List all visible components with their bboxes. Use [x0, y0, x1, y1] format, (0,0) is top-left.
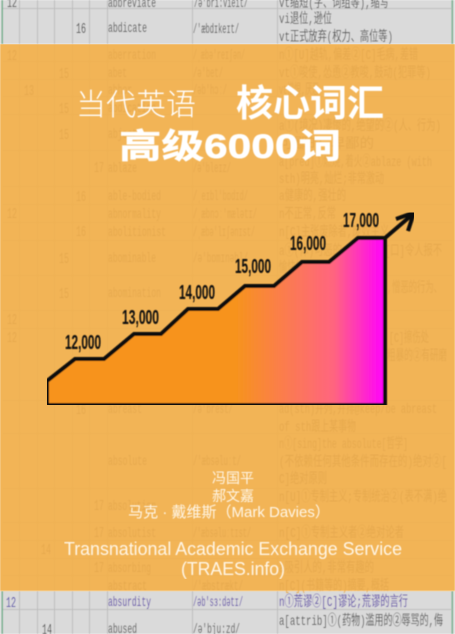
orange overlay panel with faded spreadsheet: of sth跟上某事物 [279, 419, 356, 436]
orange overlay panel with faded spreadsheet: n不正常,反常 [279, 206, 336, 223]
orange overlay panel with faded spreadsheet: 15 [59, 127, 69, 144]
orange overlay panel with faded spreadsheet: 13 [24, 83, 34, 100]
orange overlay panel with faded spreadsheet: n[C]主张废除者,废奴主义 [279, 223, 389, 241]
orange overlay panel with faded spreadsheet: 15 [59, 286, 69, 303]
step value labels: 13,000 [122, 307, 159, 329]
orange overlay panel with faded spreadsheet: 12 [7, 48, 17, 65]
orange overlay panel with faded spreadsheet: 12 [7, 330, 17, 347]
title [76, 83, 384, 166]
orange overlay panel with faded spreadsheet: 愉快的 [279, 260, 304, 277]
orange overlay panel with faded spreadsheet: 可鄙的,卑鄙的 [279, 135, 374, 153]
step value labels: 16,000 [290, 233, 326, 255]
orange overlay panel with faded spreadsheet: 12 [7, 206, 17, 223]
publisher [64, 539, 402, 579]
orange overlay panel with faded spreadsheet: 14 [41, 542, 51, 559]
orange overlay panel with faded spreadsheet: /ə'bleɪz/ [193, 161, 231, 177]
orange overlay panel with faded spreadsheet: 17 [94, 525, 104, 542]
orange overlay panel with faded spreadsheet: /'æbsəluːtɪst/ [193, 526, 251, 542]
orange overlay panel with faded spreadsheet: /ˌeɪbl'bɒdɪd/ [193, 189, 248, 205]
orange overlay panel with faded spreadsheet: abomination [108, 286, 161, 302]
background spreadsheet: bottom rows: /əb'sɜ:dətɪ/ [193, 595, 243, 611]
orange overlay panel with faded spreadsheet: absolutist [108, 526, 156, 542]
orange overlay panel with faded spreadsheet: /'æbstrækt/ [193, 579, 243, 595]
background spreadsheet: top rows: vi退位,逊位 [279, 11, 332, 28]
background spreadsheet: top rows: /'æbdɪkeɪt/ [193, 22, 239, 38]
orange overlay panel with faded spreadsheet: /ə'brest/ [193, 402, 233, 418]
orange overlay panel with faded spreadsheet: a健康的,强壮的 [279, 187, 346, 205]
orange overlay panel with faded spreadsheet: 17 [94, 160, 104, 177]
orange overlay panel with faded spreadsheet: /əb'hɔː/ [193, 83, 227, 99]
step value labels: 15,000 [235, 256, 271, 278]
background spreadsheet: top rows: 16 [76, 21, 86, 38]
authors: 冯国平 [212, 470, 254, 486]
orange overlay panel with faded spreadsheet: [C]擦伤处 [389, 329, 429, 347]
orange overlay panel with faded spreadsheet: abdication [108, 101, 156, 117]
publisher: (TRAES.info) [181, 559, 285, 579]
orange overlay panel with faded spreadsheet: able-bodied [108, 189, 161, 205]
step value labels: 12,000 [65, 332, 101, 354]
background spreadsheet: bottom rows: 12 [6, 595, 16, 612]
background spreadsheet: top rows: vt正式放弃(权力、高位等) [279, 28, 393, 46]
step value labels [65, 210, 379, 354]
orange overlay panel with faded spreadsheet: absolution [108, 499, 156, 515]
title: 高级6000词 [119, 128, 341, 166]
authors [128, 470, 330, 521]
publisher: Transnational Academic Exchange Service [64, 539, 402, 559]
arrow [385, 212, 414, 238]
title: 核心词汇 [236, 83, 384, 124]
authors: 马克 · 戴维斯（Mark Davies） [128, 504, 330, 521]
orange overlay panel with faded spreadsheet: abreast [108, 402, 142, 418]
background spreadsheet: top rows [0, 0, 455, 46]
orange overlay panel with faded spreadsheet: absolute [108, 454, 147, 470]
stepped gradient area [47, 238, 385, 405]
orange overlay panel with faded spreadsheet: 15 [59, 251, 69, 268]
orange overlay panel with faded spreadsheet: 16 [76, 224, 86, 241]
orange overlay panel with faded spreadsheet: absorbing [108, 561, 151, 577]
background spreadsheet: bottom rows: absurdity [108, 595, 151, 611]
orange overlay panel with faded spreadsheet: abolitionist [108, 225, 166, 241]
orange overlay panel with faded spreadsheet: abominable [108, 251, 156, 267]
orange overlay panel with faded spreadsheet: 15 [59, 101, 69, 118]
orange overlay panel with faded spreadsheet: abnormality [108, 207, 161, 223]
growth chart: stepped area with arrow [47, 212, 414, 405]
orange overlay panel with faded spreadsheet: 17 [94, 560, 104, 577]
orange overlay panel with faded spreadsheet: /ˌæbə'reɪʃən/ [193, 48, 245, 64]
background spreadsheet: top rows: abdicate [108, 21, 147, 37]
orange overlay panel with faded spreadsheet: abject [108, 127, 137, 143]
orange overlay panel with faded spreadsheet: abstract [108, 579, 147, 595]
orange overlay panel with faded spreadsheet: 17 [94, 498, 104, 515]
orange overlay panel with faded spreadsheet: 12 [7, 312, 17, 329]
orange overlay panel with faded spreadsheet: 16 [76, 189, 86, 206]
background spreadsheet: bottom rows [0, 591, 455, 634]
orange overlay panel with faded spreadsheet: /ˌæbnɔː'mælətɪ/ [193, 207, 257, 223]
orange overlay panel with faded spreadsheet: /ə'bɒmɪnəbl/ [193, 251, 248, 267]
orange overlay panel with faded spreadsheet: 15 [59, 66, 69, 83]
orange overlay panel with faded spreadsheet: C]绝对原则 [279, 471, 327, 488]
orange overlay panel with faded spreadsheet: ablaze [108, 161, 137, 177]
authors: 郝文嘉 [212, 488, 254, 504]
orange overlay panel with faded spreadsheet: /'æbsəluːt/ [193, 454, 241, 470]
orange overlay panel with faded spreadsheet: abhor [108, 83, 132, 99]
step value labels: 14,000 [179, 282, 215, 304]
orange overlay panel with faded spreadsheet: 16 [76, 402, 86, 419]
orange overlay panel with faded spreadsheet: /ˌæbə'lɪʃənɪst/ [193, 225, 255, 241]
orange overlay panel with faded spreadsheet: n[C](书籍等的)摘要,概括 [279, 577, 389, 595]
orange overlay panel with faded spreadsheet: vt憎恨,厌恶 [279, 81, 319, 99]
orange overlay panel with faded spreadsheet: /ə'bet/ [193, 66, 223, 82]
orange overlay panel with faded spreadsheet: a吸引人的,非常有趣的 [279, 560, 374, 577]
orange overlay panel with faded spreadsheet: aberration [108, 48, 156, 64]
title: 当代英语 [76, 89, 196, 122]
orange overlay panel with faded spreadsheet: sth)明亮,灿烂;非常激动 [279, 170, 384, 188]
step value labels: 17,000 [343, 210, 379, 232]
orange overlay panel with faded spreadsheet: abet [108, 66, 127, 82]
